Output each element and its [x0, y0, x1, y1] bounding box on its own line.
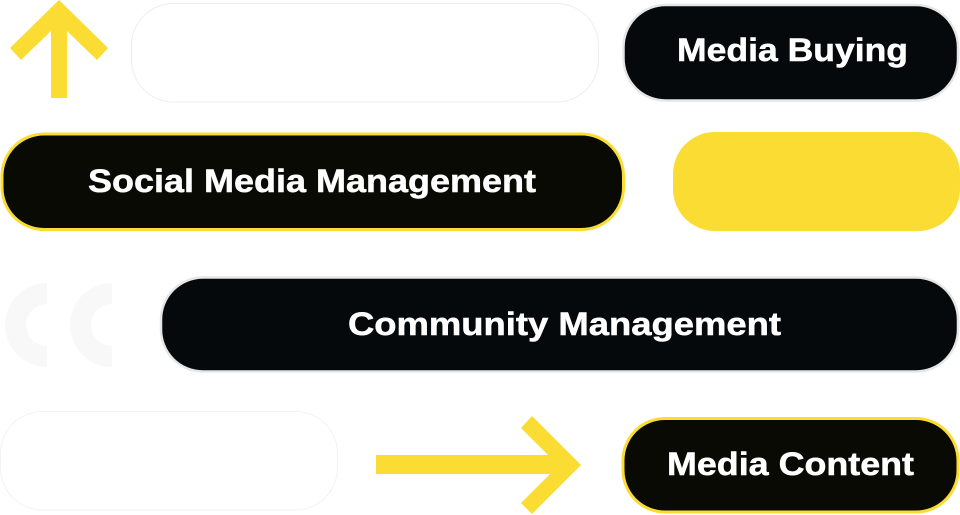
yellow pill — [673, 132, 960, 231]
pill: Media Content — [623, 418, 958, 512]
label: Media Buying: Media Buying — [677, 32, 908, 68]
icon: double chevron arcs — [5, 283, 112, 367]
empty white pill: top — [132, 4, 598, 102]
empty white pill: bottom — [0, 412, 338, 510]
pill: Community Management — [161, 278, 958, 372]
label: Media Content: Media Content — [667, 446, 914, 482]
label: Community Management: Community Management — [348, 306, 781, 342]
pill: Media Buying — [624, 5, 958, 100]
label: Social Media Management: Social Media Management — [88, 163, 536, 199]
pill: Social Media Management — [2, 134, 624, 230]
icon: right arrow — [376, 416, 581, 514]
icon: up arrow — [10, 0, 108, 98]
